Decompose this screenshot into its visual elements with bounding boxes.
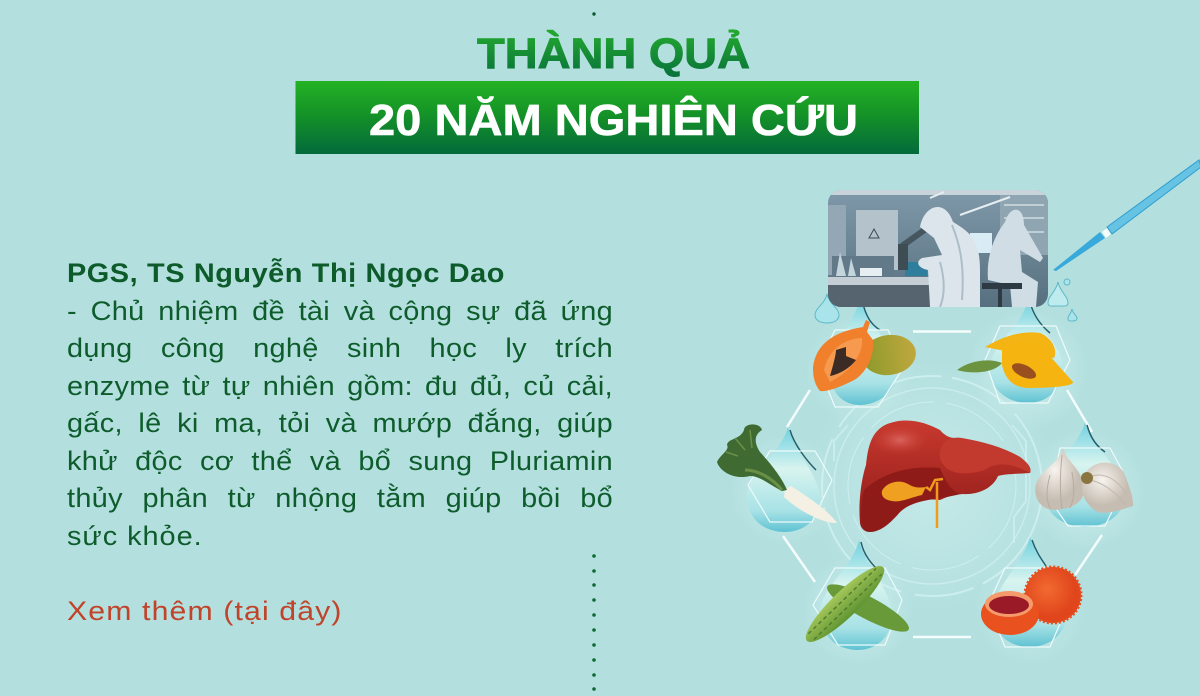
title: Thành quả: THÀNH QUẢ [477,29,750,78]
description line 5: khử độc cơ thể và bổ sung Pluriamin [67,446,613,476]
garlic [1035,448,1133,513]
gấc fruit [981,567,1081,635]
banner: 20 năm nghiên cứu: 20 NĂM NGHIÊN CỨU [369,95,858,145]
background and illustration [296,12,1200,691]
lab photo [828,190,1048,307]
glow backdrop [730,310,1145,665]
description line 3: enzyme từ tự nhiên gồm: đu đủ, củ cải, [67,371,613,401]
scientist front [918,207,980,307]
tech rings [822,376,1042,596]
description line 7: sức khỏe. [67,521,203,551]
liver [859,421,1031,532]
hexagon lines [783,332,1102,637]
water drops with small hexagons [747,279,1125,650]
author name: PGS, TS Nguyễn Thị Ngọc Dao [67,258,505,288]
dotted divider bottom [592,554,596,691]
banner: 20 năm nghiên cứu [296,81,919,154]
scientist back [988,210,1043,307]
link: see more: Xem thêm (tại đây) [67,596,343,626]
description line 1: - Chủ nhiệm đề tài và cộng sự đã ứng [67,296,613,326]
illustration: hexagon of ingredients around liver [717,160,1200,665]
description line 4: gấc, lê ki ma, tỏi và mướp đắng, giúp [67,408,613,438]
description line 2: dụng công nghệ sinh học ly trích [67,333,613,363]
pipette [1053,160,1200,271]
radish [717,424,837,523]
dotted divider top [592,12,596,16]
lê ki ma fruit [957,332,1073,388]
bitter melon [798,558,914,650]
papaya [813,320,919,391]
description line 6: thủy phân từ nhộng tằm giúp bồi bổ [67,483,613,513]
